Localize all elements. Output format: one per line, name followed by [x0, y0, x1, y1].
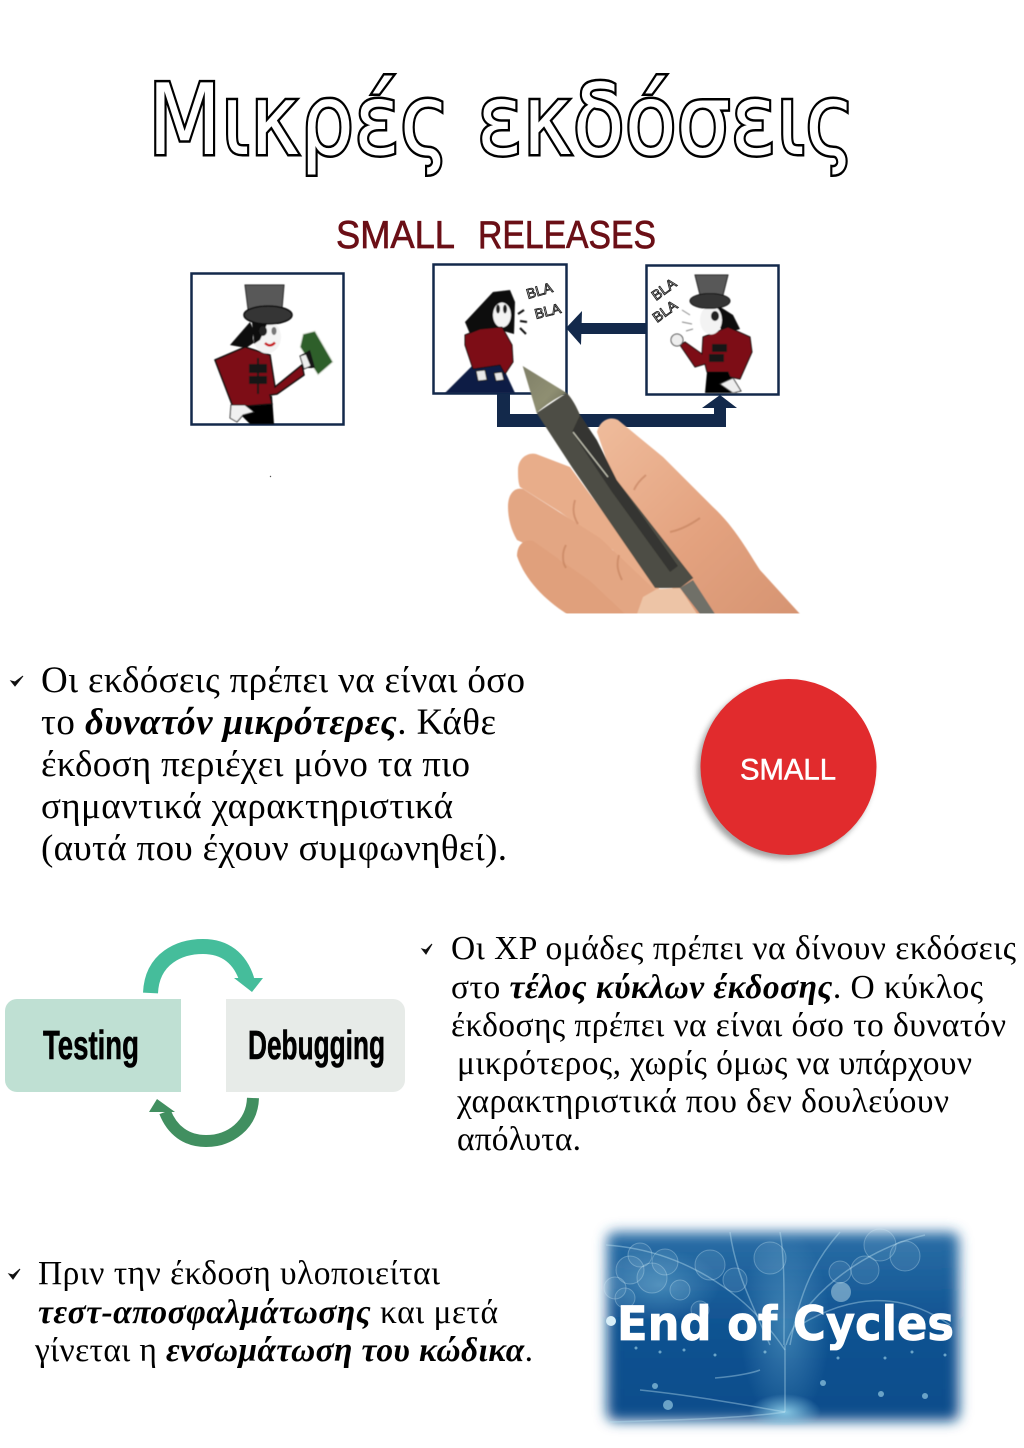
box: testing: Testing — [43, 1022, 139, 1068]
hand: upper finger — [518, 454, 660, 600]
bullet text: release cycles: στο τέλος κύκλων έκδοσης. Ο κύκλος — [451, 969, 983, 1006]
arrow: testing to debugging — [150, 946, 263, 993]
pen: tail — [680, 580, 715, 614]
bullet text: smaller releases: (αυτά που έχουν συμφωνηθεί). — [41, 828, 507, 869]
illustration: hand holding pen — [508, 366, 800, 614]
box: debugging: Debugging — [248, 1022, 385, 1068]
badge: small: SMALL — [740, 754, 836, 786]
bullet text: smaller releases: έκδοση περιέχει μόνο τα πιο — [41, 744, 470, 785]
arrow: debugging to testing — [149, 1098, 253, 1141]
heading: small releases: SMALL — [336, 214, 455, 257]
text: bla bla left: BLA — [524, 279, 555, 302]
hand: lower finger — [517, 541, 625, 614]
icon: check bullet 3 — [9, 1269, 20, 1279]
bullet text: release cycles — [422, 930, 1016, 1158]
image: end of cycles — [600, 1228, 959, 1430]
pen: body — [537, 393, 693, 588]
bullet text: debugging before integration — [9, 1255, 533, 1369]
icon: check bullet 2 — [422, 944, 432, 954]
hand: front thumb — [637, 588, 697, 614]
bullet text: release cycles: έκδοσης πρέπει να είναι όσο το δυνατόν — [451, 1007, 1006, 1044]
bullet text: smaller releases: το δυνατόν μικρότερες. Κάθε — [41, 702, 496, 743]
text: bla bla right — [648, 275, 681, 325]
bullet text: smaller releases: Οι εκδόσεις πρέπει να είναι όσο — [41, 660, 525, 701]
heading: small releases — [336, 214, 656, 257]
box: debugging — [226, 999, 405, 1092]
text: bla bla left: BLA — [533, 300, 563, 322]
hand: middle finger — [508, 489, 655, 614]
arrow: left feedback — [566, 311, 646, 345]
title: Μικρές εκδόσεις — [148, 64, 855, 178]
text: bla bla right: BLA — [649, 297, 681, 325]
bullet text: debugging before integration: τεστ-αποσφαλμάτωσης και μετά — [38, 1294, 498, 1331]
pen: tip — [523, 366, 567, 413]
illustration: character with money — [192, 274, 344, 424]
arrow: lower path up — [497, 394, 737, 427]
bullet text: smaller releases — [11, 660, 525, 869]
illustration: man speaking — [646, 266, 778, 394]
bullet text: debugging before integration: Πριν την έκδοση υλοποιείται — [38, 1255, 440, 1292]
box: testing — [5, 999, 181, 1092]
stray mark — [270, 476, 271, 477]
bullet text: release cycles: μικρότερος, χωρίς όμως να υπάρχουν — [457, 1045, 972, 1082]
bullet text: release cycles: χαρακτηριστικά που δεν δουλεύουν — [456, 1083, 949, 1120]
text: bla bla left — [524, 279, 563, 322]
bullet text: release cycles: απόλυτα. — [457, 1121, 581, 1158]
image: end of cycles: End of Cycles — [617, 1297, 954, 1352]
bullet text: release cycles: Οι XP ομάδες πρέπει να δίνουν εκδόσεις — [451, 930, 1016, 967]
badge: small — [697, 679, 876, 859]
illustration: woman listening — [434, 264, 566, 394]
text: bla bla right: BLA — [648, 275, 680, 303]
bullet text: smaller releases: σημαντικά χαρακτηριστικά — [41, 786, 453, 827]
diagram: testing and debugging cycle — [5, 946, 405, 1141]
heading: small releases: RELEASES — [478, 214, 656, 257]
icon: check bullet 1 — [11, 676, 23, 686]
bullet text: debugging before integration: γίνεται η ενσωμάτωση του κώδικα. — [34, 1332, 533, 1369]
hand: back and thumb — [597, 418, 800, 614]
